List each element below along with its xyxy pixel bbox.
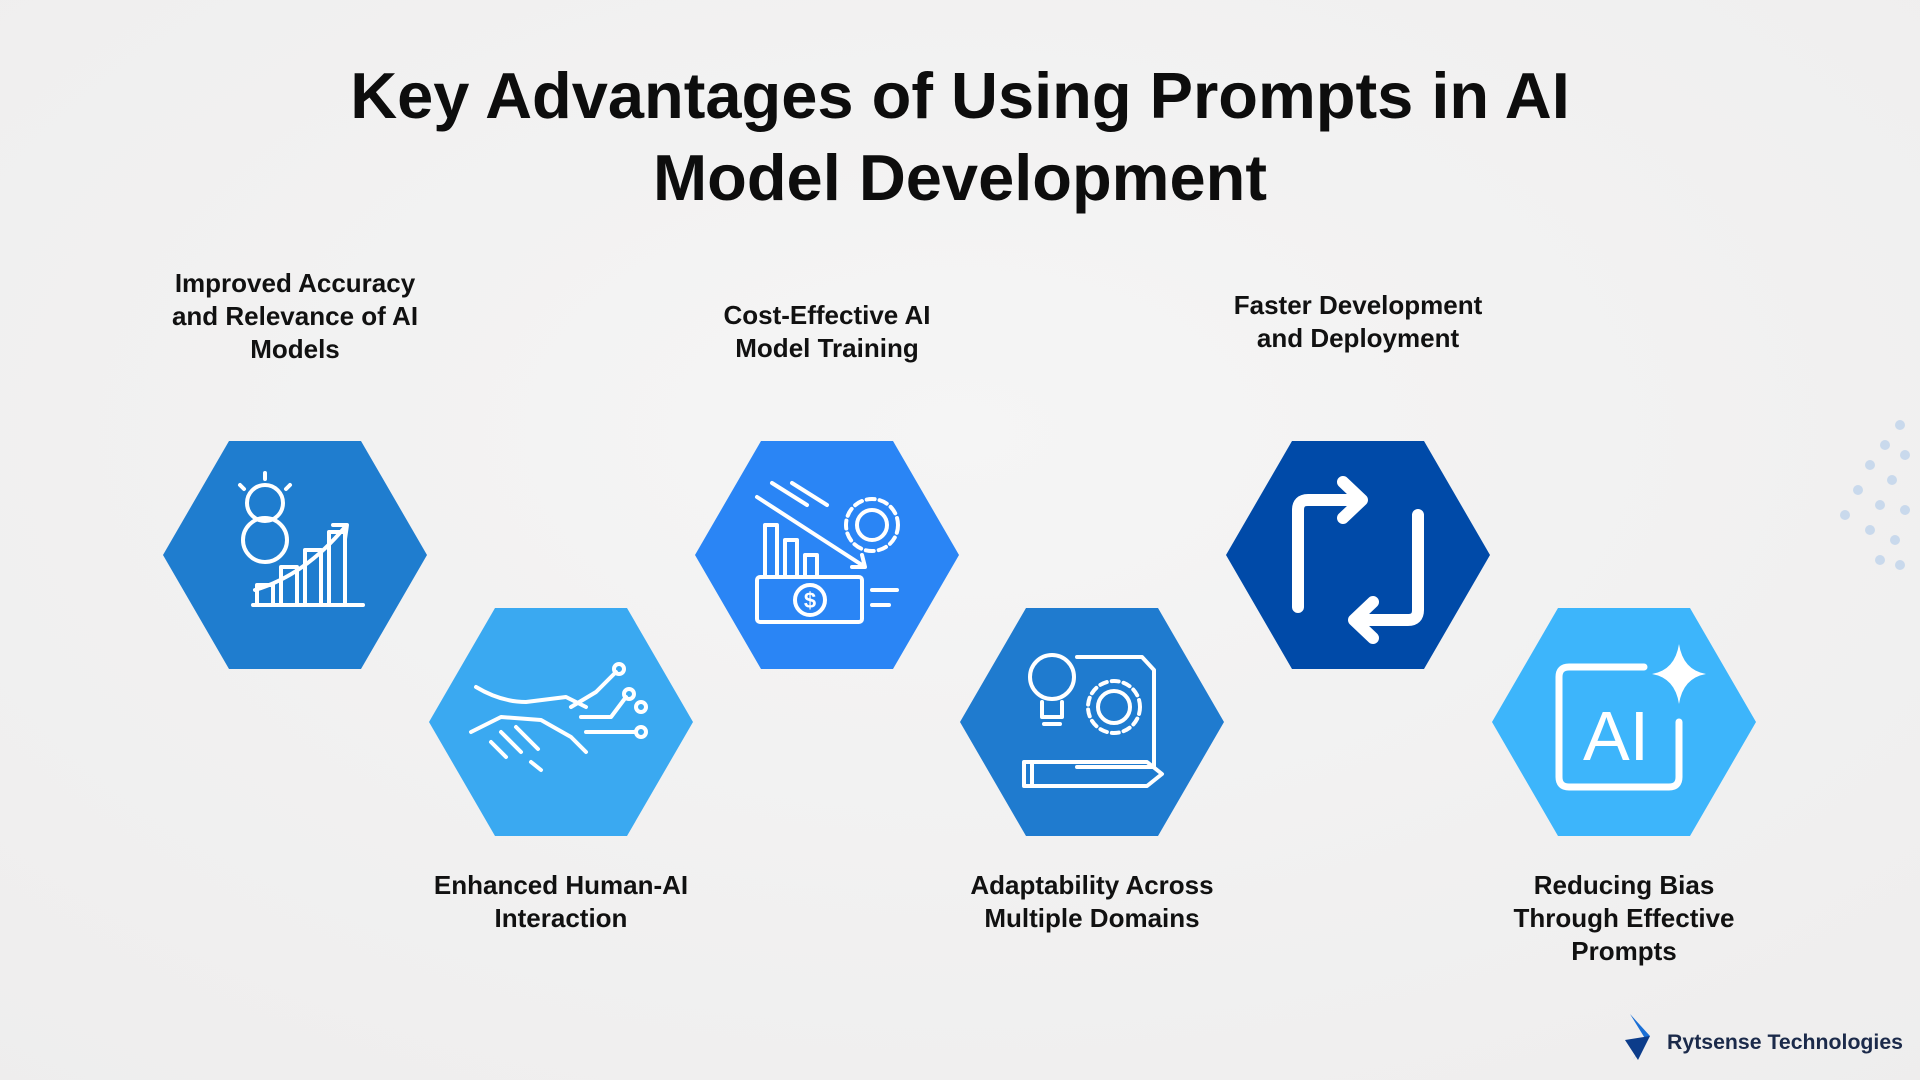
hexagon 5: faster development [1226, 441, 1490, 669]
label: cost-effective: Cost-Effective AI [723, 300, 931, 330]
decorative dots [1840, 420, 1910, 570]
hexagon 4: adaptability [960, 608, 1224, 836]
title: Model Development [653, 141, 1267, 214]
title [350, 59, 1570, 214]
label: reducing bias [1513, 870, 1735, 966]
hexagon 6: reducing bias [1492, 608, 1756, 836]
hexagon 3: cost-effective: $ [804, 588, 816, 613]
hexagon 2: human-ai [429, 608, 693, 836]
logo [1625, 1014, 1903, 1060]
title: Key Advantages of Using Prompts in AI [350, 59, 1570, 132]
label: enhanced human-ai: Enhanced Human-AI [434, 870, 688, 900]
logo: Rytsense Technologies [1667, 1031, 1903, 1054]
label: improved accuracy [172, 268, 418, 364]
label: reducing bias: Prompts [1571, 936, 1677, 966]
hexagon 1: accuracy [163, 441, 427, 669]
label: faster development: Faster Development [1234, 290, 1483, 320]
label: adaptability [970, 870, 1214, 933]
label: enhanced human-ai [434, 870, 688, 933]
label: cost-effective: Model Training [735, 333, 919, 363]
label: improved accuracy: Models [250, 334, 340, 364]
label: faster development [1234, 290, 1483, 353]
label: faster development: and Deployment [1257, 323, 1459, 353]
hexagon 3: cost-effective [695, 441, 959, 669]
label: adaptability: Multiple Domains [984, 903, 1200, 933]
label: improved accuracy: and Relevance of AI [172, 301, 418, 331]
label: adaptability: Adaptability Across [970, 870, 1214, 900]
label: reducing bias: Through Effective [1513, 903, 1735, 933]
hexagon 6: reducing bias: AI [1583, 697, 1649, 775]
label: reducing bias: Reducing Bias [1534, 870, 1714, 900]
label: cost-effective [723, 300, 931, 363]
label: improved accuracy: Improved Accuracy [175, 268, 416, 298]
label: enhanced human-ai: Interaction [495, 903, 627, 933]
